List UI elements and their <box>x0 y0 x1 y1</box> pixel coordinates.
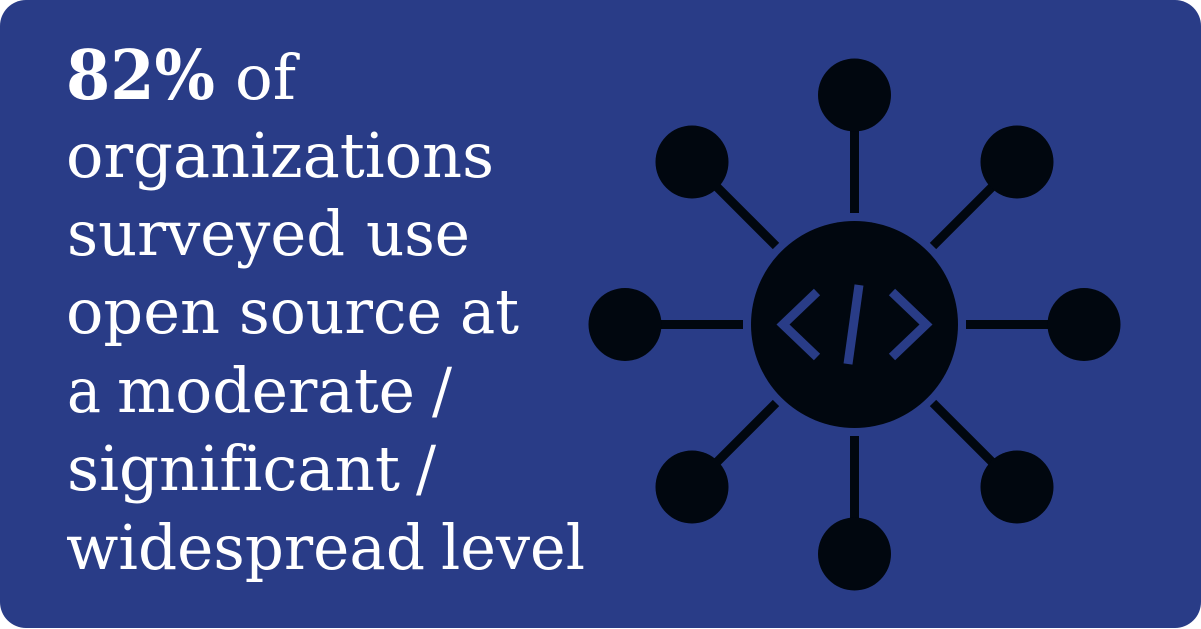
number: 82%: 82% <box>66 36 215 116</box>
word: level: level <box>441 511 585 584</box>
word: organizations: organizations <box>66 119 494 192</box>
connector lines <box>625 95 1084 554</box>
word: significant: significant <box>67 432 400 505</box>
slash: after moderate: / <box>432 354 452 427</box>
word: moderate: moderate <box>117 354 415 427</box>
central hub <box>751 221 958 428</box>
word: surveyed: surveyed <box>67 197 345 270</box>
slash: after significant: / <box>416 432 436 505</box>
text block: headline statistic <box>66 36 585 584</box>
icon: open source code network <box>588 58 1120 590</box>
code symbol <box>783 285 926 364</box>
word: use: use <box>366 197 470 270</box>
word: open: open <box>66 275 220 348</box>
word: source: source <box>239 275 442 348</box>
word: a: a <box>67 354 101 427</box>
word: widespread: widespread <box>66 511 425 584</box>
word: of: of <box>235 41 300 114</box>
word: at: at <box>460 275 519 348</box>
outer nodes <box>588 58 1120 590</box>
